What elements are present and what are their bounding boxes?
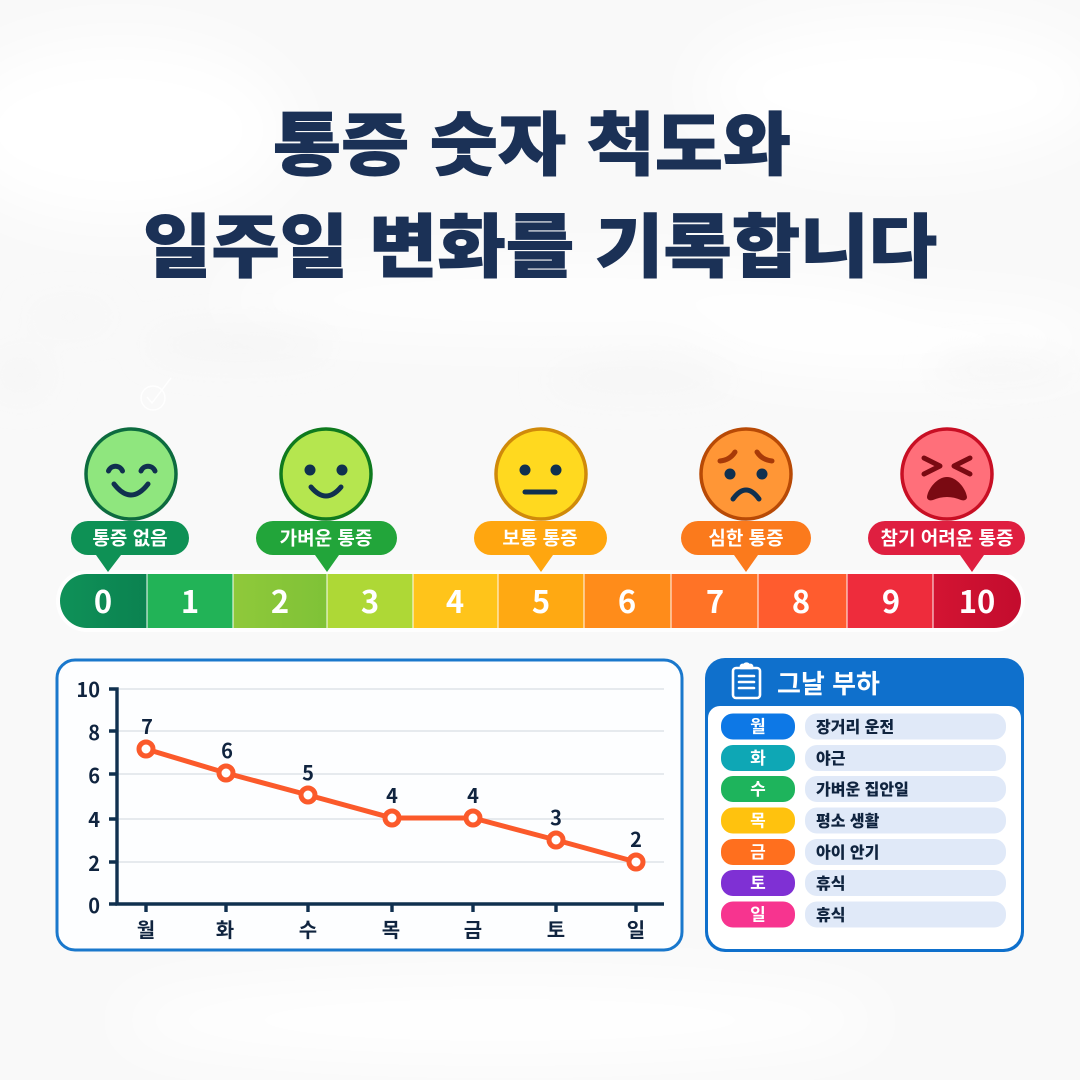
row: Friday: 금 bbox=[750, 838, 766, 863]
row: Saturday bbox=[721, 869, 1006, 896]
y axis labels: 8 bbox=[88, 717, 100, 746]
icon: agonized face bbox=[902, 429, 992, 519]
label: moderate pain: 보통 통증 bbox=[502, 524, 578, 550]
row: Tuesday: 화 bbox=[750, 744, 766, 769]
data values: 3 bbox=[550, 802, 562, 831]
title: 일주일 변화를 기록합니다 bbox=[143, 191, 937, 291]
y axis labels: 10 bbox=[76, 674, 100, 703]
pain trend line bbox=[146, 749, 636, 862]
data values: 4 bbox=[467, 780, 479, 809]
row: Tuesday: 야근 bbox=[816, 745, 846, 769]
label: unbearable pain bbox=[868, 521, 1025, 572]
x axis labels: 화 bbox=[216, 914, 234, 943]
data values: 5 bbox=[302, 757, 314, 786]
pain scale bar: 6 bbox=[618, 577, 636, 622]
icon: light smile face bbox=[281, 429, 371, 519]
row: Thursday: 평소 생활 bbox=[816, 808, 880, 832]
faint check mark bbox=[141, 378, 171, 410]
row: Tuesday bbox=[721, 744, 1006, 771]
row: Friday bbox=[721, 838, 1006, 865]
label: unbearable pain: 참기 어려운 통증 bbox=[880, 524, 1014, 550]
row: Thursday: 목 bbox=[750, 806, 766, 832]
pain scale bar: 5 bbox=[532, 577, 550, 622]
row: Sunday bbox=[721, 900, 1006, 928]
pain scale bar: 4 bbox=[446, 577, 464, 622]
row: Monday: 장거리 운전 bbox=[816, 714, 894, 738]
row: Sunday: 일 bbox=[750, 900, 766, 926]
pain scale bar: 2 bbox=[271, 577, 289, 622]
panel heading: 그날 부하 bbox=[777, 664, 880, 701]
icon: sad face bbox=[701, 429, 791, 519]
label: no pain bbox=[71, 521, 189, 572]
panel: daily load bbox=[705, 658, 1024, 952]
row: Thursday bbox=[721, 806, 1006, 834]
row: Wednesday: 가벼운 집안일 bbox=[816, 776, 909, 800]
y axis labels: 2 bbox=[88, 848, 100, 877]
label: no pain: 통증 없음 bbox=[92, 524, 168, 550]
y axis labels: 0 bbox=[88, 890, 100, 919]
row: Monday bbox=[721, 712, 1006, 740]
data values: 2 bbox=[630, 824, 642, 853]
row: Wednesday bbox=[721, 775, 1006, 802]
data values: 4 bbox=[386, 780, 398, 809]
data values bbox=[141, 711, 642, 853]
row: Wednesday: 수 bbox=[750, 775, 766, 800]
x axis labels: 금 bbox=[464, 914, 482, 943]
x axis labels bbox=[137, 914, 645, 943]
x axis labels: 월 bbox=[137, 914, 155, 943]
panel: weekly line chart bbox=[57, 660, 682, 950]
pain scale bar: 8 bbox=[792, 577, 810, 622]
label: severe pain: 심한 통증 bbox=[708, 524, 784, 550]
pain scale bar: 0 bbox=[94, 577, 112, 622]
y axis labels: 4 bbox=[88, 804, 100, 833]
x axis labels: 일 bbox=[627, 914, 645, 943]
row: Saturday: 토 bbox=[750, 869, 766, 894]
label: severe pain bbox=[681, 521, 811, 572]
pain scale bar: 9 bbox=[882, 577, 900, 622]
x axis labels: 토 bbox=[547, 914, 565, 943]
x axis labels: 수 bbox=[299, 914, 317, 943]
x axis labels: 목 bbox=[382, 914, 400, 943]
row: Saturday: 휴식 bbox=[816, 870, 845, 894]
data points bbox=[139, 742, 643, 869]
row: Friday: 아이 안기 bbox=[816, 839, 879, 863]
y axis labels bbox=[76, 674, 100, 919]
icon: clipboard bbox=[733, 664, 760, 698]
title bbox=[143, 89, 937, 291]
title: 통증 숫자 척도와 bbox=[273, 89, 791, 189]
pain scale bar bbox=[60, 574, 1021, 628]
data values: 6 bbox=[221, 735, 233, 764]
data values: 7 bbox=[141, 711, 153, 740]
chart axes bbox=[109, 689, 664, 912]
row: Monday: 월 bbox=[750, 712, 766, 738]
row: Sunday: 휴식 bbox=[816, 902, 845, 926]
label: moderate pain bbox=[474, 521, 607, 572]
label: mild pain: 가벼운 통증 bbox=[280, 524, 372, 550]
pain scale bar: 3 bbox=[361, 577, 379, 622]
pain scale bar: 7 bbox=[706, 577, 724, 622]
icon: neutral face bbox=[496, 429, 586, 519]
label: mild pain bbox=[256, 521, 397, 572]
y axis labels: 6 bbox=[88, 760, 100, 789]
icon: very happy face bbox=[86, 429, 176, 519]
pain scale bar: 10 bbox=[959, 577, 995, 622]
pain scale bar: 1 bbox=[181, 577, 199, 622]
